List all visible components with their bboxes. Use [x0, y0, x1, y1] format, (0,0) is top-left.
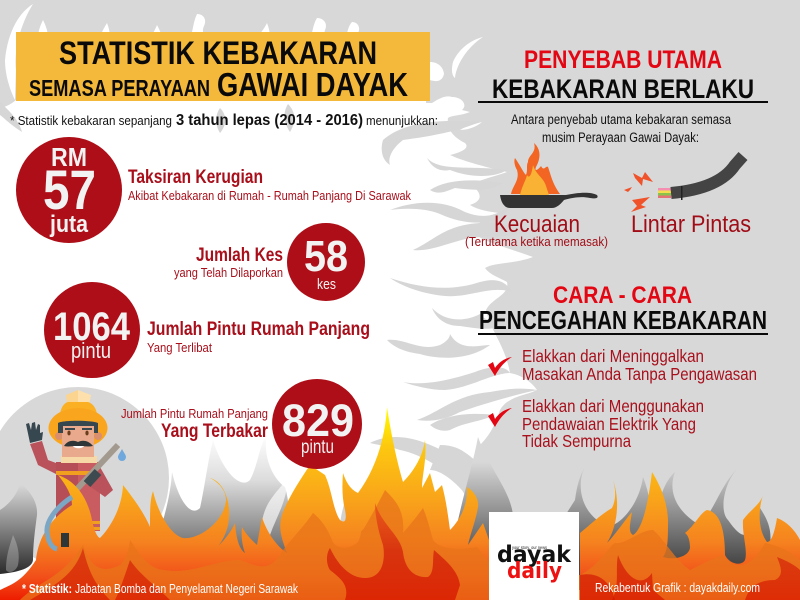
- icon: frying pan with fire: [500, 143, 598, 208]
- stat: 829 pintu: 829: [282, 395, 354, 446]
- ears: [55, 432, 63, 440]
- causes intro text: Antara penyebab utama kebakaran semasa: [511, 112, 731, 127]
- prevention tip 2: Pendawaian Elektrik Yang: [522, 414, 696, 434]
- heading: penyebab utama: [478, 46, 768, 104]
- grey flames left: [0, 482, 37, 574]
- prevention tip 1: Elakkan dari Meninggalkan: [522, 346, 704, 366]
- stat: 58 kes: [174, 223, 365, 301]
- other arm: [88, 467, 113, 497]
- decorative phoenix wisps: [0, 102, 537, 510]
- stat: 829 pintu: Jumlah Pintu Rumah Panjang: [121, 406, 268, 421]
- footer: source: * Statistik:: [22, 581, 72, 596]
- helmet crest: [66, 390, 78, 412]
- causes intro text: musim Perayaan Gawai Dayak:: [542, 130, 699, 145]
- causes intro text: [511, 112, 731, 145]
- water drop: [118, 449, 126, 461]
- prevention tip 1: [488, 346, 757, 384]
- logo: dayak daily: daily: [507, 559, 562, 584]
- stat: RM 57 juta: [16, 137, 411, 243]
- stat: RM 57 juta: Akibat Kebakaran di Rumah - Rumah Panjang Di Sarawak: [128, 188, 411, 203]
- face: [62, 422, 94, 457]
- grey flames middle: [140, 433, 354, 585]
- title banner: [16, 32, 430, 103]
- footer: source: Jabatan Bomba dan Penyelamat Negeri Sarawak: [75, 581, 298, 596]
- stat: 829 pintu: pintu: [301, 437, 334, 458]
- heading: penyebab utama: KEBAKARAN BERLAKU: [492, 74, 754, 104]
- prevention tip 2: [488, 396, 704, 451]
- helmet brim: [48, 408, 108, 448]
- stat: RM 57 juta: RM: [51, 142, 87, 172]
- stat: 1064 pintu: pintu: [71, 338, 111, 363]
- stat: 1064 pintu: [44, 282, 370, 378]
- stat: 829 pintu: Yang Terbakar: [161, 421, 268, 442]
- heading: cara pencegahan: [478, 282, 768, 335]
- intro note: menunjukkan:: [366, 113, 438, 128]
- stat: 1064 pintu: Yang Terlibat: [147, 340, 212, 355]
- label: kecuaian: (Terutama ketika memasak): [465, 234, 608, 249]
- title banner: SEMASA PERAYAAN: [29, 75, 210, 101]
- brows and eyes: [65, 428, 75, 430]
- logo: dayak daily: dayak: [497, 542, 572, 568]
- footer: credit: Rekabentuk Grafik : dayakdaily.com: [595, 580, 760, 595]
- body: [56, 462, 78, 531]
- intro note: * Statistik kebakaran sepanjang: [10, 113, 172, 128]
- stat: 58 kes: Jumlah Kes: [196, 245, 283, 266]
- title banner: STATISTIK KEBAKARAN: [59, 35, 377, 71]
- hair: [58, 421, 98, 433]
- label: kecuaian: [465, 211, 608, 249]
- stat: 1064 pintu: 1064: [53, 305, 131, 349]
- moustache: [64, 441, 93, 446]
- intro note: [10, 112, 438, 129]
- stat: 829 pintu: [121, 379, 362, 469]
- glove: [26, 422, 43, 443]
- logo: dayak daily: your story, our news: [512, 545, 548, 550]
- footer: source: [22, 581, 298, 596]
- helmet dome: [60, 402, 97, 416]
- label: lintar pintas: Lintar Pintas: [631, 211, 751, 238]
- logo: dayak daily: [489, 512, 579, 600]
- firefighter illustration: [26, 390, 126, 531]
- collar: [61, 456, 97, 463]
- stat: 58 kes: kes: [317, 276, 336, 293]
- stat: 1064 pintu: Jumlah Pintu Rumah Panjang: [147, 319, 370, 340]
- prevention tip 2: Tidak Sempurna: [522, 431, 631, 451]
- prevention tip 1: Masakan Anda Tanpa Pengawasan: [522, 364, 757, 384]
- heading: cara pencegahan: CARA - CARA: [553, 282, 692, 309]
- prevention tip 2: Elakkan dari Menggunakan: [522, 396, 704, 416]
- grey flames right: [448, 437, 800, 590]
- intro note: 3 tahun lepas (2014 - 2016): [176, 112, 363, 129]
- title banner: GAWAI DAYAK: [217, 66, 408, 103]
- label: kecuaian: Kecuaian: [494, 211, 580, 238]
- stat: 58 kes: yang Telah Dilaporkan: [174, 265, 283, 280]
- stat: RM 57 juta: Taksiran Kerugian: [128, 167, 263, 188]
- heading: penyebab utama: PENYEBAB UTAMA: [524, 46, 722, 74]
- stat: 58 kes: 58: [304, 232, 348, 281]
- main flames: [0, 407, 800, 600]
- stat: RM 57 juta: juta: [49, 211, 89, 238]
- stat: RM 57 juta: 57: [43, 158, 96, 221]
- grey circle behind firefighter: [0, 387, 169, 569]
- waving arm: [30, 441, 56, 474]
- firefighter hose and boot: [47, 497, 72, 549]
- nozzle: [77, 445, 118, 489]
- icon: short-circuit cable: [622, 156, 743, 212]
